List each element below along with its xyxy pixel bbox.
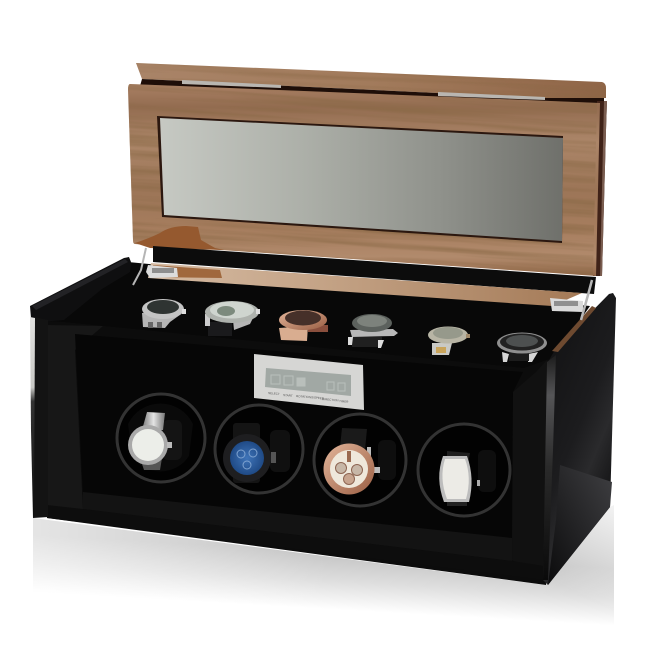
front: velvet main panel (75, 334, 523, 540)
control panel: button labels: TIMER (339, 399, 349, 404)
left panel: highlight (30, 317, 35, 518)
winder 1 (117, 394, 205, 482)
right panel: side (543, 293, 616, 585)
cabinet front (34, 320, 552, 585)
right panel: wood inlay (552, 306, 596, 352)
control panel: button labels (268, 391, 349, 404)
watch: winder 3 rose chronograph (324, 444, 380, 494)
lid: right side highlight (600, 101, 607, 276)
lid: gap (140, 79, 604, 104)
watch: top row 6 dark bezel (497, 332, 547, 362)
lid: mirror frame (157, 116, 563, 243)
right panel: front edge highlight (543, 355, 556, 580)
illustration: open watch winder cabinet (30, 63, 616, 618)
control panel: button labels: DIRECTION (322, 397, 339, 402)
front: bottom plinth (83, 492, 512, 561)
winder 4 (418, 424, 510, 516)
watch: top row 5 two tone (428, 326, 470, 355)
front: left velvet wall (45, 325, 103, 512)
watch: top row 1 steel (142, 299, 186, 328)
lid: dark wood reflection (135, 226, 224, 250)
floor shadow (33, 505, 614, 630)
front: bottom rail (47, 505, 544, 580)
winder 3 (314, 414, 406, 506)
hinge: top left (182, 80, 281, 88)
left panel: front face (33, 317, 48, 518)
lower lid recess: black slot (153, 246, 596, 294)
watch: winder 4 tonneau (439, 451, 480, 506)
control panel: button labels: START (283, 393, 293, 398)
watch: winder 1 steel and white (128, 412, 172, 470)
hinge: left (133, 248, 178, 285)
lower lid: wood strip (148, 263, 582, 306)
control panel: lcd segments (271, 375, 345, 391)
hinge: right (550, 280, 592, 320)
lid: mirror (160, 118, 563, 241)
watch: top row 4 dark dial (348, 314, 398, 348)
control panel: button labels: SELECT (268, 391, 280, 396)
lid: right side edge (593, 101, 607, 276)
winder 2 (215, 405, 303, 493)
left panel: top edge (30, 257, 131, 322)
control panel: lcd screen (265, 368, 351, 396)
front: right velvet wall (512, 360, 547, 578)
lid: outer top edge (136, 63, 606, 98)
watch: top row 2 white dial (205, 301, 260, 336)
tray: top row well (31, 262, 590, 400)
watch: winder 2 blue dial (223, 434, 276, 482)
control panel (254, 354, 364, 410)
watch: top row 3 rose gold (279, 310, 328, 341)
hinge: top right (438, 92, 545, 100)
lid: wood face (128, 84, 600, 276)
control panel: button labels: ROTATIONS/SPEED (296, 394, 325, 401)
